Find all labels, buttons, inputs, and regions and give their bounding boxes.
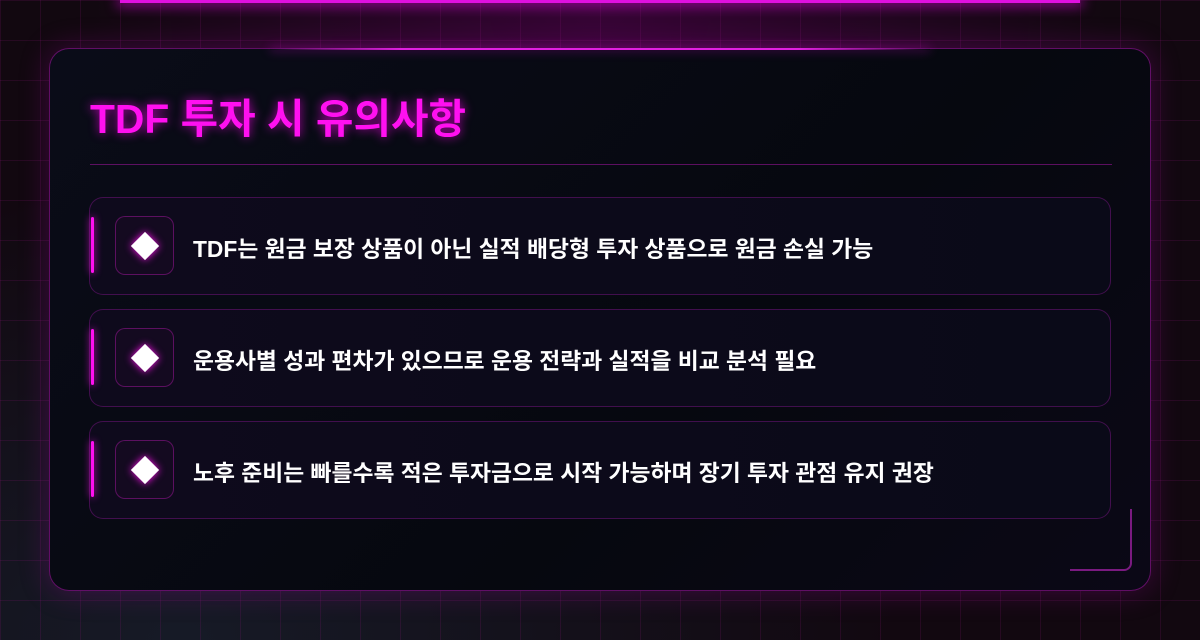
panel: main card — [49, 48, 1151, 591]
item 2 — [89, 309, 1111, 407]
text 2: 운용사별 성과 편차가 있으므로 운용 전략과 실적을 비교 분석 필요 — [193, 348, 816, 374]
item 1 — [89, 197, 1111, 295]
icon: diamond — [115, 328, 174, 387]
icon: diamond — [115, 440, 174, 499]
text 1: TDF는 원금 보장 상품이 아닌 실적 배당형 투자 상품으로 원금 손실 가능 — [193, 236, 873, 262]
icon: diamond — [115, 216, 174, 275]
text 3: 노후 준비는 빠를수록 적은 투자금으로 시작 가능하며 장기 투자 관점 유지 권장 — [193, 460, 934, 486]
item 3 — [89, 421, 1111, 519]
title: TDF 투자 시 유의사항 — [90, 96, 466, 142]
